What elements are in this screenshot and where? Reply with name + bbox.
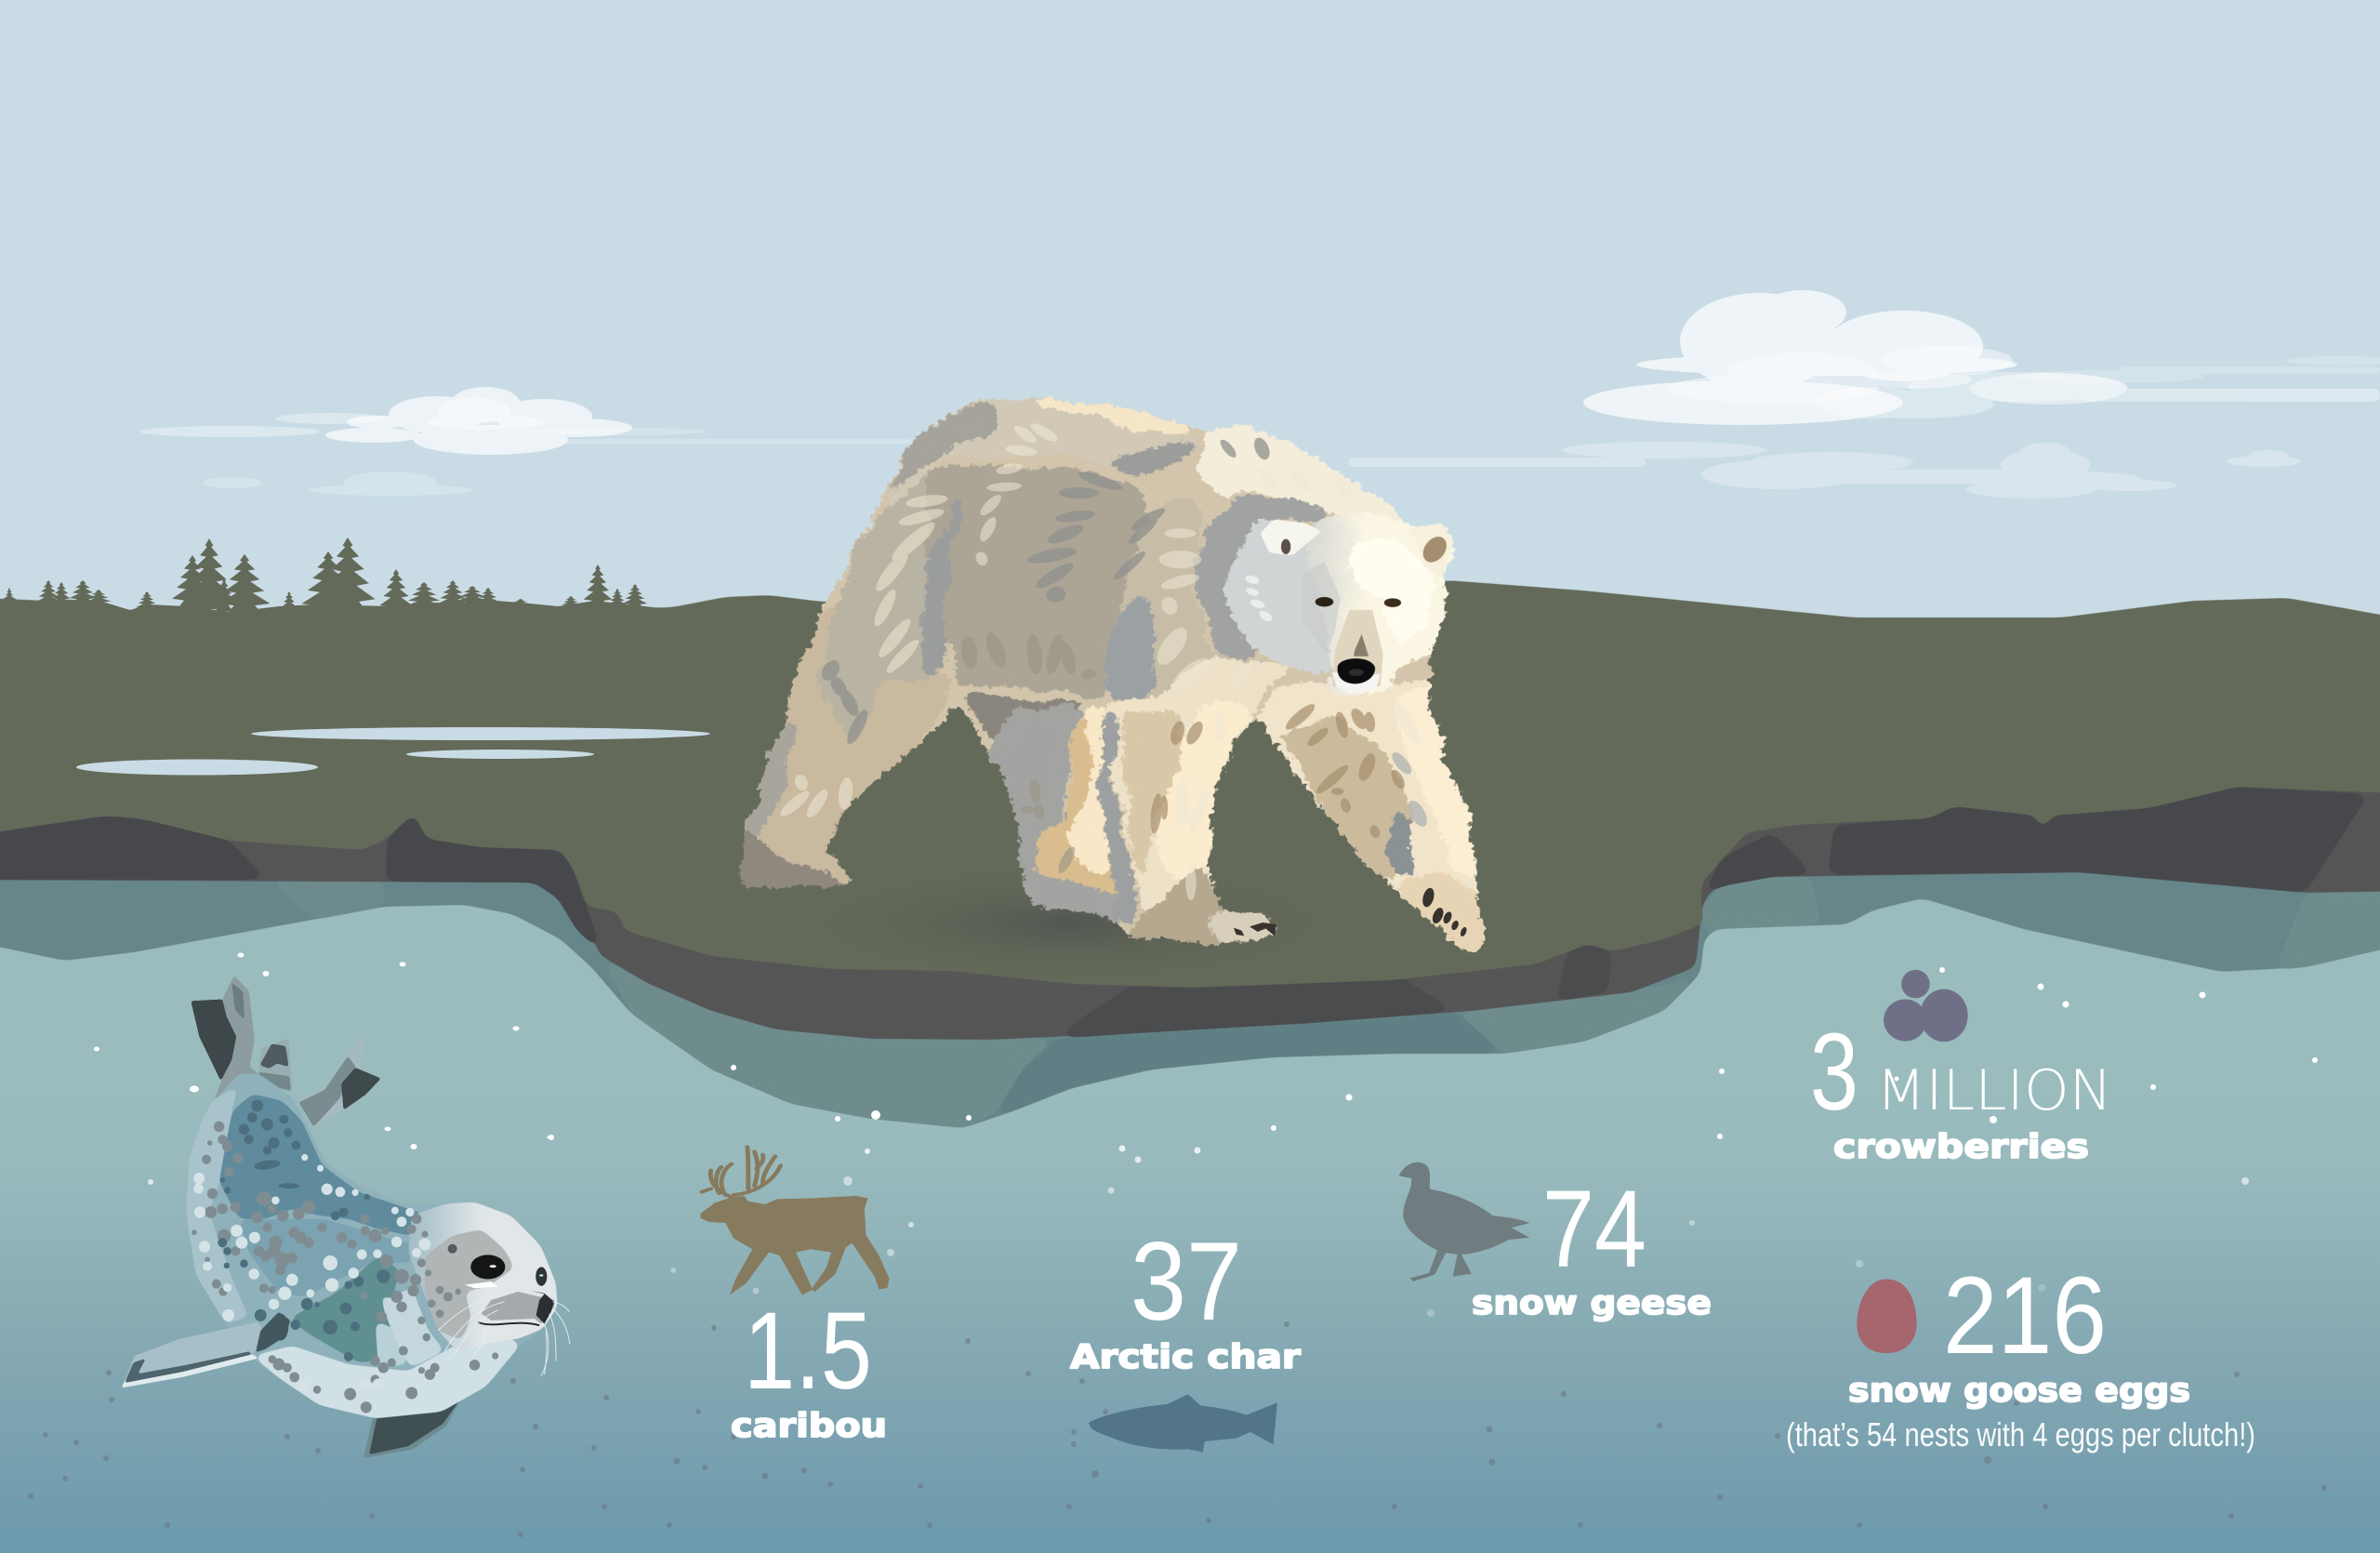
seal front flipper (121, 1312, 290, 1388)
value: 74: 74 (1542, 1168, 1646, 1291)
underwater ice shelf shadow (0, 865, 2380, 1128)
value: 1.5: 1.5 (744, 1290, 872, 1413)
icon: goose (1398, 1162, 1529, 1281)
stat: snow goose eggs (1786, 1254, 2255, 1453)
icon: caribou (700, 1147, 890, 1295)
label: caribou: caribou (731, 1407, 887, 1445)
bear head details (1243, 519, 1453, 695)
seal lower flipper (364, 1395, 463, 1458)
illustration: polar bear (697, 372, 1534, 1004)
icon: egg (1857, 1280, 1917, 1353)
label: snow geese: snow geese (1472, 1284, 1712, 1322)
label: crowberries: crowberries (1833, 1128, 2089, 1166)
seal spots (192, 1122, 498, 1413)
seal body (186, 1073, 558, 1418)
treeline (0, 538, 669, 623)
stat: caribou (700, 1147, 890, 1445)
value: 216: 216 (1943, 1254, 2107, 1377)
bear fur leaf markings (776, 420, 1431, 900)
tundra ponds (76, 727, 710, 776)
seal darker back spots (218, 1099, 390, 1361)
value unit: MILLION: MILLION (1876, 1058, 2112, 1123)
stat: snow geese (1398, 1162, 1712, 1322)
seal whiskers (438, 1294, 570, 1376)
seal head (408, 1202, 558, 1352)
label: Arctic char: Arctic char (1070, 1338, 1301, 1376)
seal light spots (193, 1154, 430, 1392)
illustration: ringed seal (121, 976, 570, 1458)
left clouds (139, 387, 911, 496)
particles: floating snow and sediment (28, 952, 2327, 1537)
value: 37: 37 (1130, 1219, 1242, 1344)
icon: berries (1884, 970, 1968, 1042)
right clouds (1348, 290, 2380, 498)
icon: fish (1089, 1394, 1277, 1453)
seal back shading (186, 1083, 522, 1418)
bear paw claws (1234, 887, 1468, 937)
stat: crowberries (1810, 970, 2112, 1166)
seal rear flippers (191, 976, 381, 1127)
value: 3: 3 (1810, 1011, 1858, 1134)
label: snow goose eggs: snow goose eggs (1848, 1372, 2190, 1410)
note: nests per clutch: (that’s 54 nests with 4 eggs per clutch!) (1786, 1415, 2255, 1453)
dark rock cliff edge (0, 781, 2380, 1040)
tundra land (0, 580, 2380, 988)
stat: Arctic char (1070, 1219, 1301, 1453)
water with depth gradient (0, 865, 2380, 1553)
bear ground shadow (772, 858, 1367, 989)
